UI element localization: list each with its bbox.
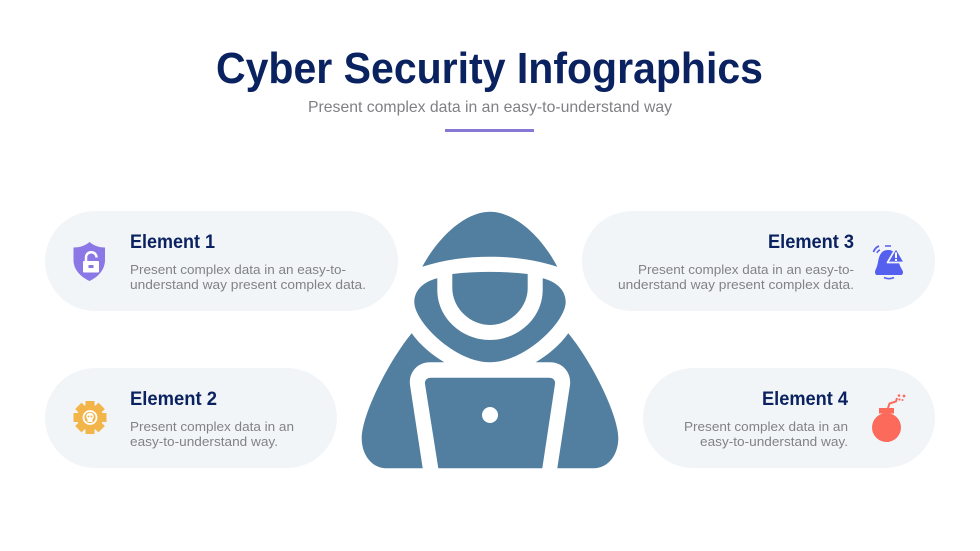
text block: element 2: easy-to-understand way. <box>130 434 278 449</box>
left shoulder <box>362 333 444 468</box>
text block: element 3: understand way present complex data. <box>618 277 854 292</box>
text block: element 3 <box>618 262 854 292</box>
heading: element 3: Element 3 <box>768 232 854 253</box>
icon: bell with warning <box>874 246 904 279</box>
laptop <box>425 378 555 468</box>
heading: element 1: Element 1 <box>130 232 215 253</box>
right shoulder <box>536 333 618 468</box>
text block: element 2 <box>130 419 294 449</box>
panel: element 1 <box>45 211 398 311</box>
icon: bomb <box>872 394 905 442</box>
accent bar <box>445 129 534 132</box>
text block: element 3: Present complex data in an easy-to- <box>638 262 854 277</box>
text block: element 2: Present complex data in an <box>130 419 294 434</box>
title: Cyber Security Infographics <box>216 44 763 93</box>
icon: gear with skull <box>74 401 106 434</box>
text block: element 1 <box>130 262 366 292</box>
panel: element 4 <box>643 368 935 468</box>
lower hood <box>414 278 566 362</box>
text block: element 1: Present complex data in an easy-to- <box>130 262 346 277</box>
hood top <box>422 212 557 267</box>
heading: element 4: Element 4 <box>762 389 848 410</box>
face <box>452 272 528 325</box>
text block: element 4 <box>684 419 848 449</box>
text block: element 1: understand way present complex data. <box>130 277 366 292</box>
text block: element 4: easy-to-understand way. <box>700 434 848 449</box>
panel: element 2 <box>45 368 337 468</box>
subtitle: Present complex data in an easy-to-understand way <box>308 99 672 116</box>
icon: shield with open padlock <box>74 242 105 281</box>
heading: element 2: Element 2 <box>130 389 217 410</box>
text block: element 4: Present complex data in an <box>684 419 848 434</box>
panel: element 3 <box>582 211 935 311</box>
laptop logo <box>482 407 498 423</box>
icon: hooded hacker with laptop <box>362 212 618 468</box>
